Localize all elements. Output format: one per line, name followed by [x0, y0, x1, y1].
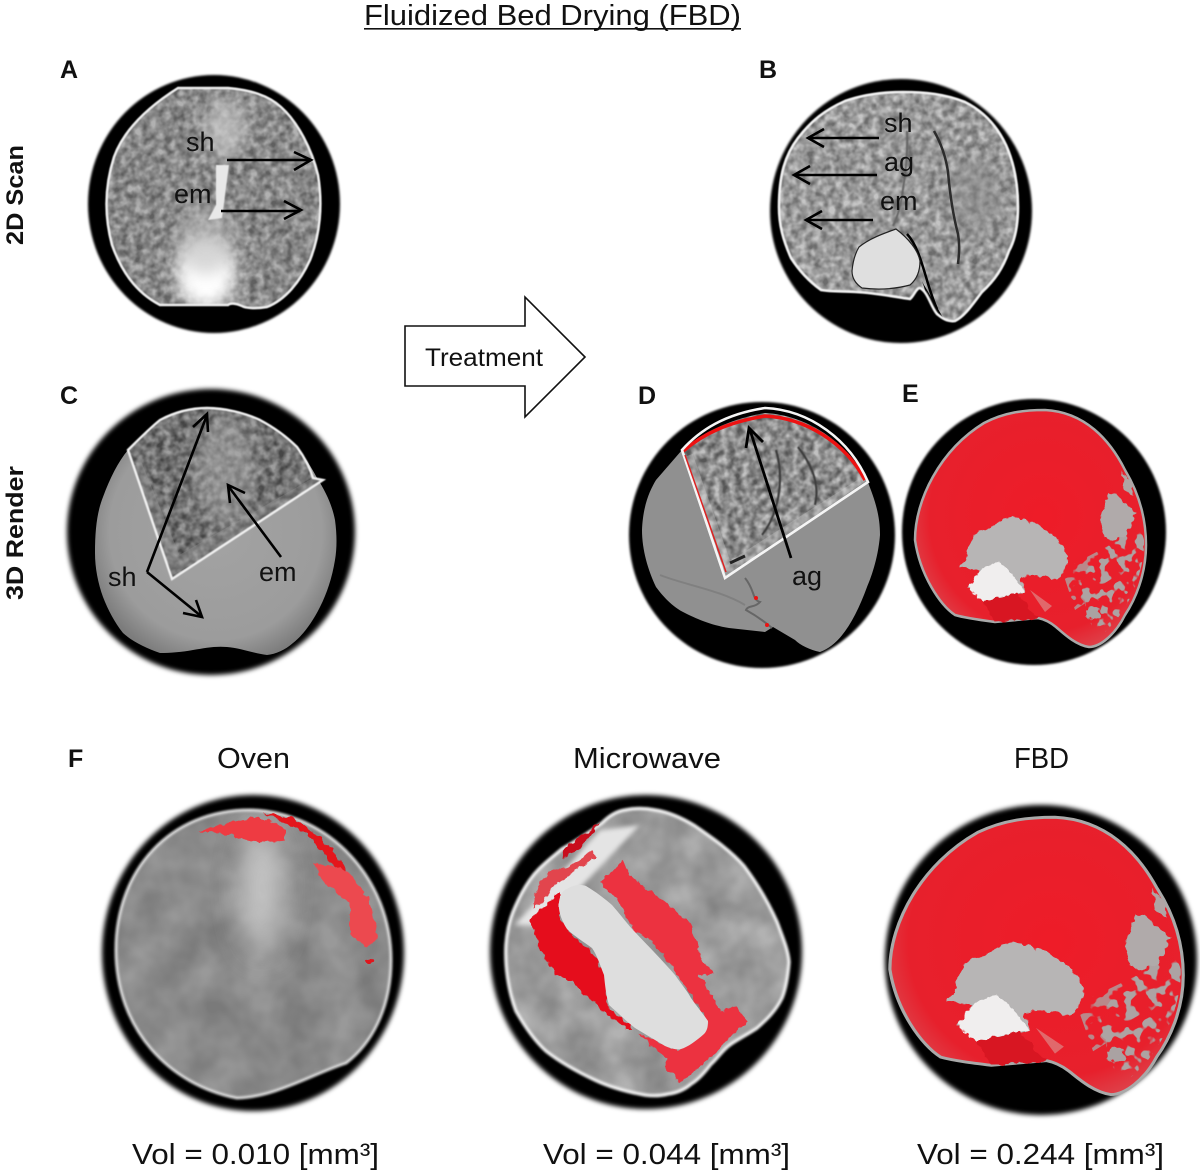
arrow: sh to surface	[147, 572, 202, 617]
label: em: em	[880, 186, 918, 216]
arrow: sh to shell top	[147, 414, 208, 572]
label: sh: sh	[186, 127, 215, 157]
panel E: red air-gap render	[902, 399, 1166, 665]
arrow: Treatment	[405, 297, 585, 417]
arrow: ag to aleurone	[794, 166, 877, 184]
panel F: FBD seed	[885, 805, 1197, 1115]
label: sh: sh	[884, 108, 913, 138]
arrow: ag to aleurone	[746, 428, 791, 558]
arrow: em to embryo	[806, 211, 873, 229]
panel label C: C	[60, 382, 78, 410]
panel D: 3D render after treatment	[629, 402, 895, 668]
red air-gap regions	[530, 823, 747, 1082]
arrow: Treatment: Treatment	[425, 344, 543, 372]
red air-gap regions	[198, 813, 378, 964]
panel C: 3D render before treatment	[67, 389, 355, 675]
panel label B: B	[759, 56, 777, 84]
label: em: em	[174, 179, 212, 209]
panel label A: A	[60, 56, 78, 84]
label: em: em	[259, 557, 297, 587]
arrow: em to shell right	[221, 201, 301, 219]
row label: 3D Render: 3D Render	[2, 466, 29, 600]
row label: 2D Scan: 2D Scan	[2, 145, 29, 245]
heading: Oven: Oven	[217, 743, 290, 775]
label: ag: ag	[884, 147, 914, 177]
panel B: 2D scan after treatment	[770, 79, 1032, 343]
heading: Microwave: Microwave	[573, 743, 721, 775]
heading: FBD: FBD	[1014, 743, 1069, 775]
embryo gap	[208, 165, 229, 220]
panel F: Microwave seed	[490, 795, 802, 1109]
label: ag: ag	[792, 561, 822, 591]
embryo	[559, 885, 708, 1049]
panel F: Oven seed	[102, 795, 404, 1111]
arrow: sh to shell right	[227, 152, 311, 170]
panel label D: D	[638, 382, 656, 410]
arrow: sh to shell	[808, 129, 879, 147]
title: Fluidized Bed Drying (FBD)	[364, 0, 741, 32]
panel label F: F	[68, 745, 83, 773]
panel label E: E	[902, 380, 919, 408]
panel A: 2D scan before treatment	[88, 75, 340, 333]
arrow: em to embryo	[228, 485, 281, 557]
label: sh: sh	[108, 562, 137, 592]
